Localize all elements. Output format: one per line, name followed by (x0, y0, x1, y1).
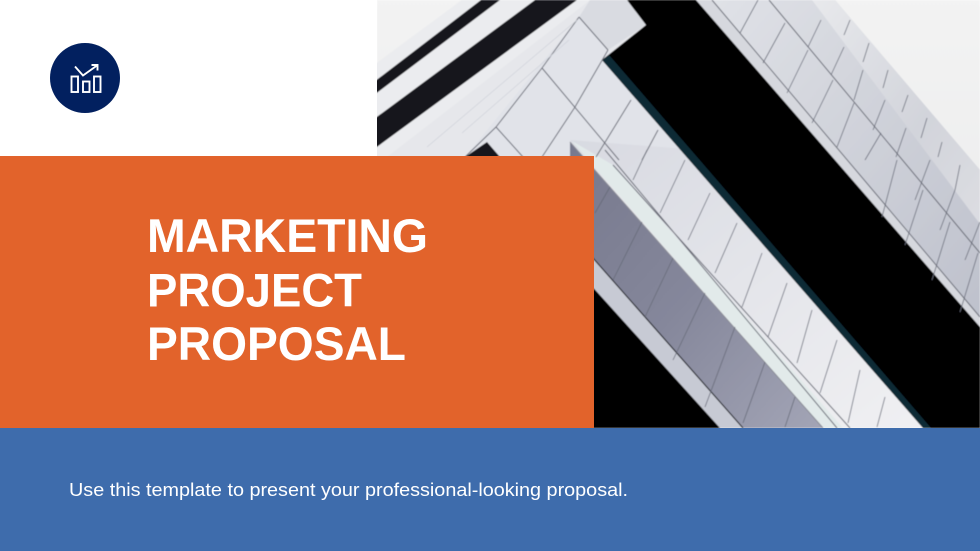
panel: orange title block (0, 156, 594, 428)
subtitle text: Use this template to present your professional-looking proposal. (69, 479, 628, 500)
title: PROPOSAL (147, 318, 406, 371)
title (147, 210, 428, 371)
icon: navy circle with bar chart and rising arrow (50, 43, 120, 113)
panel: blue footer band (0, 428, 980, 551)
photo: skyscraper looking up (377, 0, 980, 428)
title: MARKETING (147, 210, 428, 263)
title: PROJECT (147, 264, 362, 318)
